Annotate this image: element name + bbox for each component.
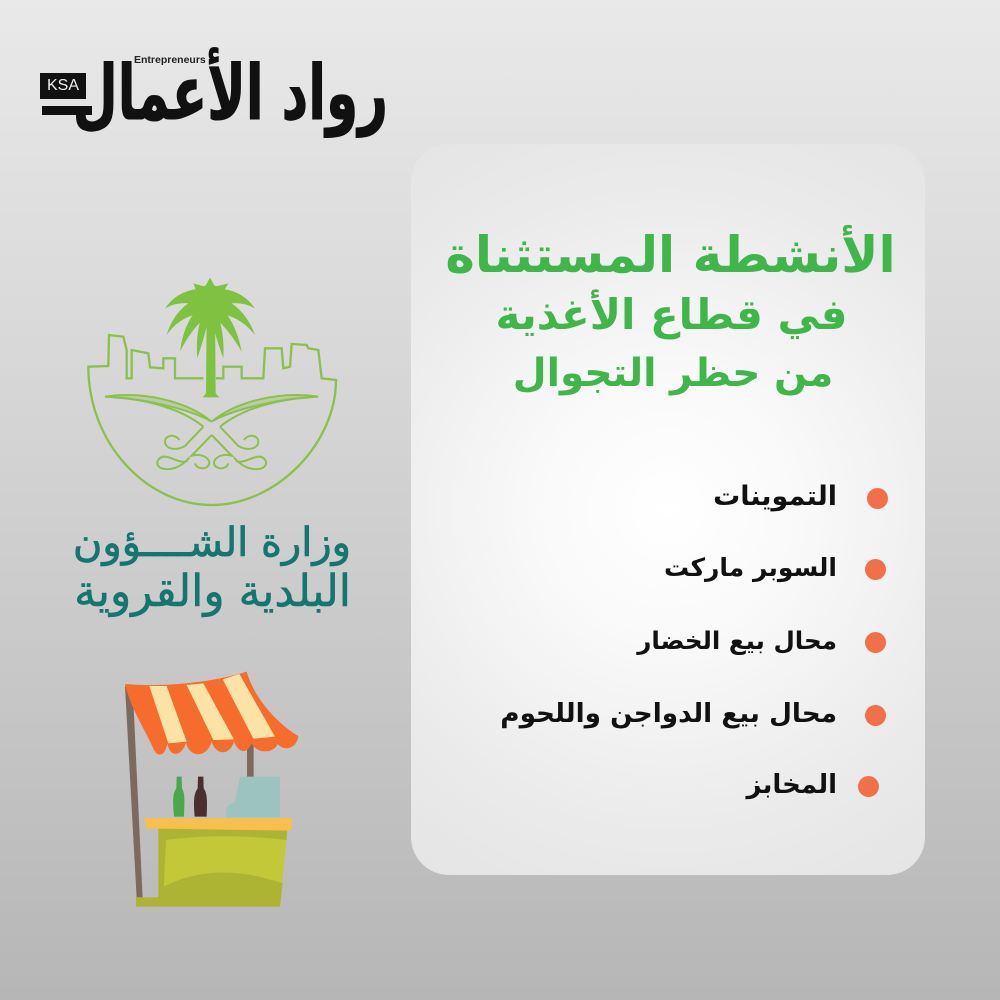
palm crown [165,278,255,358]
item 3 bullet [865,632,886,653]
crossed swords [105,395,318,469]
item 3 text: محال بيع الخضار [637,626,837,655]
city skyline and bowl [88,335,336,505]
panel: exempted activities [411,144,925,875]
logo English word: Entrepreneurs [134,54,206,66]
item 2 text: السوبر ماركت [664,553,837,582]
market stall [125,672,298,907]
item 1 bullet [867,488,888,509]
stall base [136,828,287,907]
item 4 text: محال بيع الدواجن واللحوم [500,699,837,729]
stall front post [125,687,143,898]
item 1 text: التموينات [713,481,837,512]
ministry name line 2: البلدية والقروية [74,566,351,617]
logo KSA badge: KSA [47,77,79,94]
bottle dark [194,777,207,817]
awning [125,672,298,755]
logo KSA badge [40,73,86,99]
item 4 bullet [865,705,886,726]
bottle green [173,777,184,817]
palm trunk [203,313,219,397]
logo underline bar [42,106,92,115]
item 2 bullet [865,559,886,580]
ministry name line 1: وزارة الشــــؤون [73,520,351,566]
counter top [144,818,292,831]
logo: Entrepreneurs KSA [40,47,388,138]
heading line 2: في قطاع الأغذية [496,290,847,339]
heading line 1: الأنشطة المستثناة [445,226,896,284]
heading line 3: من حظر التجوال [513,351,833,396]
cash register [226,777,280,817]
logo Arabic wordmark: رواد الأعمال [73,49,388,137]
item 5 bullet [858,776,879,797]
stall back post [247,740,254,778]
item 5 text: المخابز [746,770,837,800]
